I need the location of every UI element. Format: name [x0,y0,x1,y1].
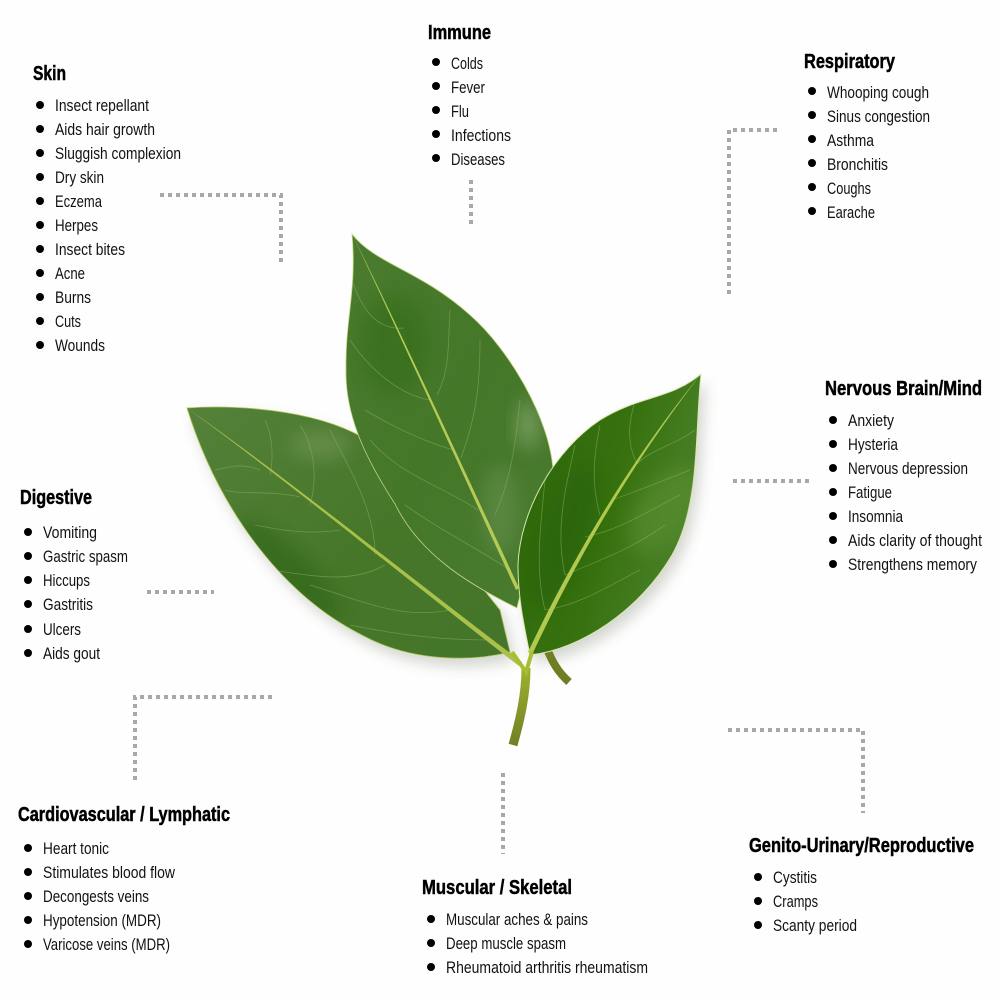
heading: immune: Immune [428,22,491,44]
list: genito-urinary: Cramps [773,892,818,911]
list: respiratory: Whooping cough [827,83,929,102]
list: respiratory: Bronchitis [827,155,888,174]
list: skin: Dry skin [55,168,104,187]
connector: cardiovascular [135,697,272,780]
heading: skin: Skin [33,63,66,85]
heading: digestive: Digestive [20,487,92,509]
center leaf [346,234,553,608]
connector: nervous [733,479,809,483]
list: respiratory: Sinus congestion [827,107,930,126]
list: genito-urinary: Scanty period [773,916,857,935]
connector: genito-urinary [728,730,863,813]
panel: digestive [20,487,128,663]
list: skin: Wounds [55,336,105,355]
list: digestive: Hiccups [43,571,90,590]
list: cardiovascular: Decongests veins [43,887,149,906]
list: cardiovascular: Hypotension (MDR) [43,911,161,930]
heading: respiratory: Respiratory [804,51,896,73]
list: muscular: Deep muscle spasm [446,934,566,953]
leaf joint [512,652,532,672]
list: skin: Eczema [55,192,102,211]
connector: immune [469,180,473,228]
list: muscular: Rheumatoid arthritis rheumatism [446,958,648,977]
connector: respiratory [729,130,777,296]
list: skin: Cuts [55,312,81,331]
list: cardiovascular: Varicose veins (MDR) [43,935,170,954]
list: cardiovascular: Stimulates blood flow [43,863,176,882]
panel: muscular / skeletal [422,877,648,977]
list: muscular: Muscular aches & pains [446,910,588,929]
list: digestive [24,523,128,663]
left leaf [187,407,522,666]
list: respiratory: Earache [827,203,875,222]
list: respiratory: Coughs [827,179,871,198]
list: nervous [829,411,982,574]
list: nervous: Hysteria [848,435,898,454]
list: digestive: Vomiting [43,523,97,542]
list: immune: Flu [451,102,469,121]
illustration: three green leaves [187,234,717,745]
list: muscular [427,910,648,977]
list: nervous: Anxiety [848,411,894,430]
center midrib [352,234,519,590]
list: genito-urinary: Cystitis [773,868,817,887]
list: cardiovascular [24,839,176,954]
list: nervous: Nervous depression [848,459,968,478]
list: immune [432,54,511,169]
panel: immune [428,22,511,169]
list: immune: Infections [451,126,511,145]
list: digestive: Aids gout [43,644,100,663]
right midrib [528,374,701,655]
rear stem [546,646,569,682]
panel: nervous brain/mind [825,378,982,574]
connector: skin [160,195,281,264]
list: skin: Herpes [55,216,98,235]
list: skin: Insect bites [55,240,125,259]
list: nervous: Insomnia [848,507,903,526]
list: digestive: Gastritis [43,595,93,614]
connector: digestive [147,590,214,594]
list: genito-urinary [754,868,857,935]
list: digestive: Ulcers [43,620,81,639]
connector: muscular [501,773,505,854]
heading: cardiovascular / lymphatic: Cardiovascular / Lymphatic [18,804,230,826]
list: skin: Burns [55,288,91,307]
panel: genito-urinary/reproductive [749,835,974,935]
left midrib [187,408,522,666]
panel: skin [33,63,181,355]
main stem [513,668,526,745]
list: skin: Aids hair growth [55,120,155,139]
list: skin [36,96,181,355]
list: respiratory: Asthma [827,131,874,150]
panel: cardiovascular / lymphatic [18,804,230,954]
list: skin: Acne [55,264,85,283]
list: cardiovascular: Heart tonic [43,839,109,858]
list: immune: Colds [451,54,483,73]
panel: respiratory [804,51,930,222]
list: skin: Insect repellant [55,96,149,115]
right leaf [515,374,717,655]
list: skin: Sluggish complexion [55,144,181,163]
list: digestive: Gastric spasm [43,547,128,566]
list: nervous: Fatigue [848,483,892,502]
list: immune: Diseases [451,150,505,169]
leaf shadow [192,382,706,666]
list: immune: Fever [451,78,485,97]
heading: muscular / skeletal: Muscular / Skeletal [422,877,572,899]
list: respiratory [808,83,930,222]
